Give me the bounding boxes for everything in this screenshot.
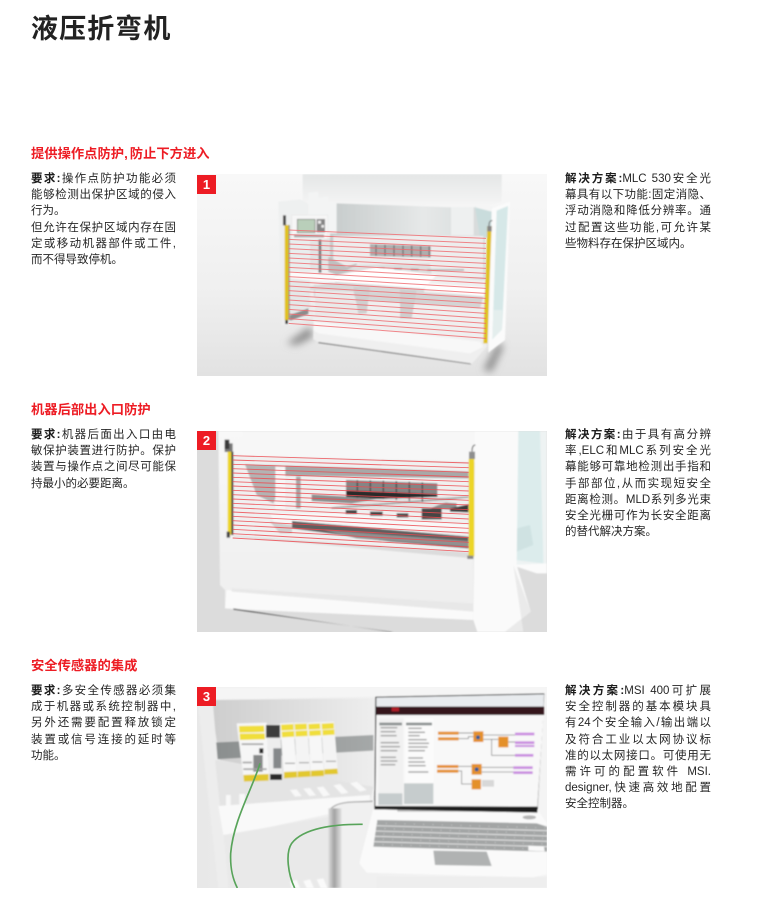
text: section 3 requirement: 装置或信号连接的延时等: [31, 734, 176, 746]
text: section 3 solution: 安全控制器。: [565, 798, 634, 810]
text: section 3 solution: [565, 684, 711, 810]
controller modules: [237, 723, 269, 782]
text: section 2 solution: 率,ELC和MLC系列安全光: [565, 445, 711, 457]
text: section 2 solution: 解决方案:由于具有高分辨: [565, 429, 711, 441]
text: section 2 solution: [565, 428, 711, 538]
light curtain beams: [233, 456, 469, 552]
badge 1: 1: [203, 177, 210, 192]
text: section 2 solution: 安全光栅可作为长安全距离: [565, 510, 711, 522]
panel: illustration 3, safety controller and laptop: [197, 687, 547, 888]
panel: illustration 1, press brake with light curtain: [197, 174, 547, 376]
text: section 2 requirement: 要求:机器后面出入口由电: [31, 429, 176, 441]
badge 2: [197, 431, 216, 450]
text: section 2 requirement: 持最小的必要距离。: [31, 478, 134, 490]
text: section 1 solution: 幕具有以下功能:固定消隐、: [565, 189, 711, 201]
text: section 2 requirement: 敏保护装置进行防护。保护: [31, 445, 176, 457]
text: section 1 solution: 过配置这些功能,可允许某: [565, 222, 711, 234]
text: section 1 requirement: 行为。: [31, 205, 66, 217]
text: section 1 requirement: 定或移动机器部件或工件,: [31, 238, 176, 250]
text: section 2 solution: 幕能够可靠地检测出手指和: [565, 461, 711, 473]
text: section 2 requirement: [31, 428, 176, 490]
text: section 3 requirement: 成于机器或系统控制器中,: [31, 701, 176, 713]
text: section 1 requirement: [31, 172, 176, 266]
text: section 1 solution: 浮动消隐和降低分辨率。通: [565, 205, 711, 217]
heading: section 1: 提供操作点防护,防止下方进入: [31, 146, 210, 161]
text: section 3 solution: 准的以太网接口。可使用无: [565, 750, 711, 762]
text: section 3 solution: 解决方案:MSI 400可扩展: [565, 685, 711, 697]
panel: illustration 2, rear access protection: [197, 431, 547, 632]
text: section 1 requirement: 而不得导致停机。: [31, 254, 123, 266]
ethernet cables: [231, 763, 363, 888]
text: section 3 solution: 安全控制器的基本模块具: [565, 701, 711, 713]
heading: section 3: 安全传感器的集成: [31, 658, 137, 673]
badge 1: [197, 175, 216, 194]
text: section 1 solution: 解决方案:MLC 530安全光: [565, 173, 711, 185]
laptop: [377, 877, 547, 888]
text: section 1 requirement: 要求:操作点防护功能必须: [31, 173, 176, 185]
badge 3: 3: [203, 689, 210, 704]
text: section 1 solution: [565, 172, 711, 250]
badge 3: [197, 687, 216, 706]
text: section 1 solution: 些物料存在保护区域内。: [565, 238, 692, 250]
text: section 2 solution: 的替代解决方案。: [565, 526, 657, 538]
text: section 3 solution: designer,快速高效地配置: [565, 782, 711, 794]
text: section 3 solution: 需许可的配置软件 MSI.: [565, 766, 711, 778]
text: section 1 requirement: 但允许在保护区域内存在固: [31, 222, 176, 234]
text: section 2 solution: 手部部位,从而实现短安全: [565, 478, 711, 490]
text: section 3 solution: 及符合工业以太网协议标: [565, 734, 711, 746]
text: section 3 requirement: [31, 684, 176, 762]
light curtain beams: [289, 230, 486, 338]
badge 2: 2: [203, 433, 210, 448]
text: section 1 requirement: 能够检测出保护区域的侵入: [31, 189, 176, 201]
text: section 3 solution: 有24个安全输入/输出端以: [565, 717, 711, 729]
text: section 3 requirement: 要求:多安全传感器必须集: [31, 685, 176, 697]
title: 液压折弯机: [31, 14, 172, 44]
text: section 2 requirement: 装置与操作点之间尽可能保: [31, 461, 176, 473]
text: section 2 solution: 距离检测。MLD系列多光束: [565, 494, 711, 506]
text: section 3 requirement: 功能。: [31, 750, 66, 762]
heading: section 2: 机器后部出入口防护: [31, 402, 151, 417]
text: section 3 requirement: 另外还需要配置释放锁定: [31, 717, 176, 729]
